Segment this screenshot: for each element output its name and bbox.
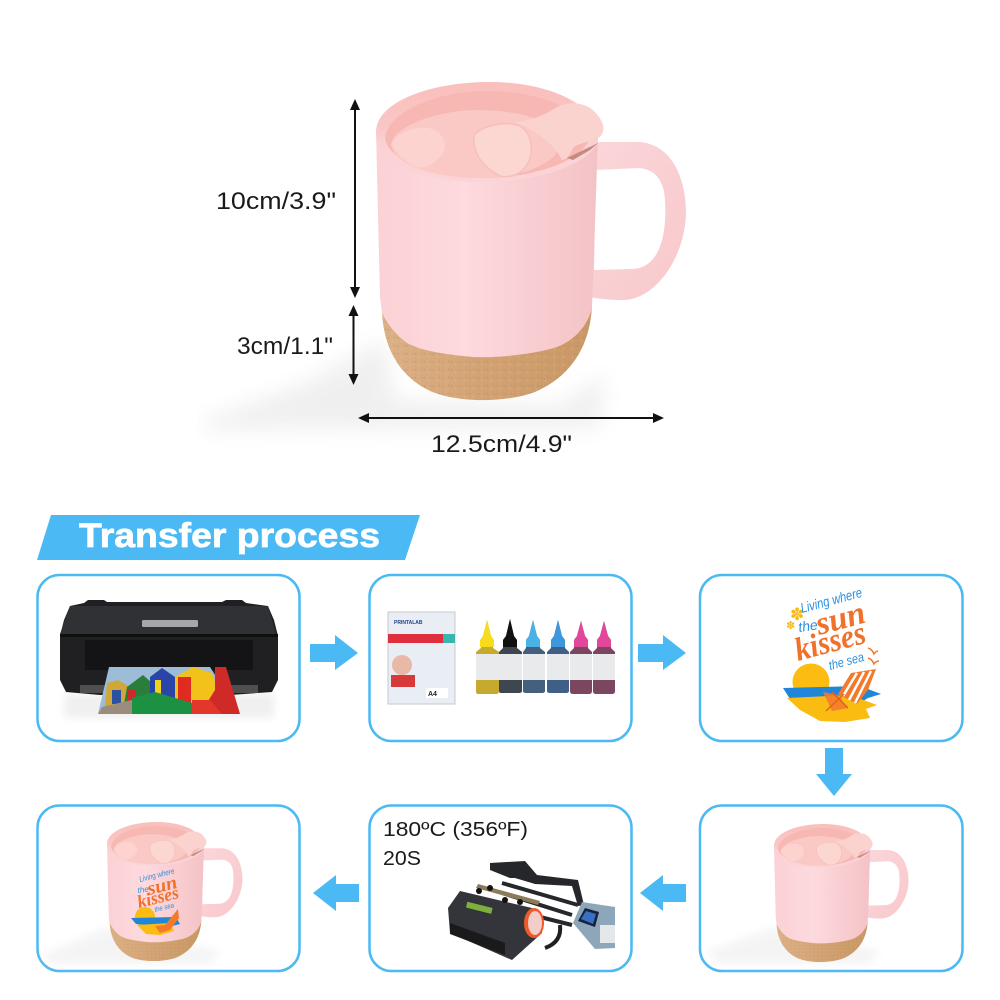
arrow: press to finished mug xyxy=(313,875,359,911)
icon: finished mug xyxy=(107,822,242,961)
artwork: sun kisses the sea: kisses xyxy=(791,615,870,669)
panel: heat press: 20S xyxy=(383,848,421,870)
main mug xyxy=(376,82,686,400)
printed design on mug: Living where xyxy=(138,866,176,884)
dimension label: 10cm: 10cm/3.9" xyxy=(216,188,336,215)
arrow: supplies to printed design xyxy=(638,635,686,670)
blank mug shadow xyxy=(706,928,880,964)
arrow: printer to supplies xyxy=(310,635,358,670)
arrow: design to blank mug xyxy=(816,748,852,796)
icon: transfer paper: PRINTALAB xyxy=(394,620,423,626)
artwork: sun kisses the sea: ✽ xyxy=(786,620,795,632)
dimension arrow: mug height xyxy=(350,99,360,298)
panel: heat press xyxy=(370,806,632,971)
artwork: sun kisses the sea: ✽ xyxy=(790,605,804,624)
mug shadow xyxy=(170,340,605,450)
icon: blank mug xyxy=(774,824,909,962)
panel: printed design xyxy=(700,575,962,741)
dimension arrow: base height xyxy=(348,305,358,385)
arrow: mug to heat press xyxy=(640,875,686,911)
panel: finished mug xyxy=(38,806,300,971)
icon: transfer paper xyxy=(388,612,455,704)
printed design on mug: kisses xyxy=(135,882,181,912)
printed design on mug: sun xyxy=(144,872,179,900)
artwork: sun kisses the sea xyxy=(783,584,881,722)
printed design on mug: the xyxy=(137,884,150,895)
icon: printer reflection xyxy=(64,694,274,718)
dimension label: 3cm: 3cm/1.1" xyxy=(237,333,333,360)
artwork: sun kisses the sea: sun xyxy=(811,595,869,643)
finished mug shadow xyxy=(42,928,220,964)
icon: heat press machine xyxy=(448,861,615,960)
panel: blank mug xyxy=(700,806,962,971)
artwork: sun kisses the sea: the xyxy=(797,616,819,635)
heading banner: Transfer process: Transfer process xyxy=(79,517,380,555)
heading banner: Transfer process xyxy=(37,515,420,560)
panel: printer xyxy=(38,575,300,741)
press settings: 180ºC (356ºF) xyxy=(383,819,528,841)
icon: printer xyxy=(60,600,278,714)
dimension label: 12.5cm: 12.5cm/4.9" xyxy=(431,431,572,458)
panel: paper and inks xyxy=(370,575,632,741)
printed photo xyxy=(98,667,240,714)
printed design on mug: the sea xyxy=(154,902,175,914)
dimension arrow: width xyxy=(358,413,664,423)
artwork: sun kisses the sea: the sea xyxy=(827,649,866,673)
artwork: sun kisses the sea: Living where xyxy=(799,584,864,616)
icon: transfer paper: A4 xyxy=(428,691,437,698)
icon: ink bottles xyxy=(476,619,615,694)
printed design on mug xyxy=(131,866,181,935)
